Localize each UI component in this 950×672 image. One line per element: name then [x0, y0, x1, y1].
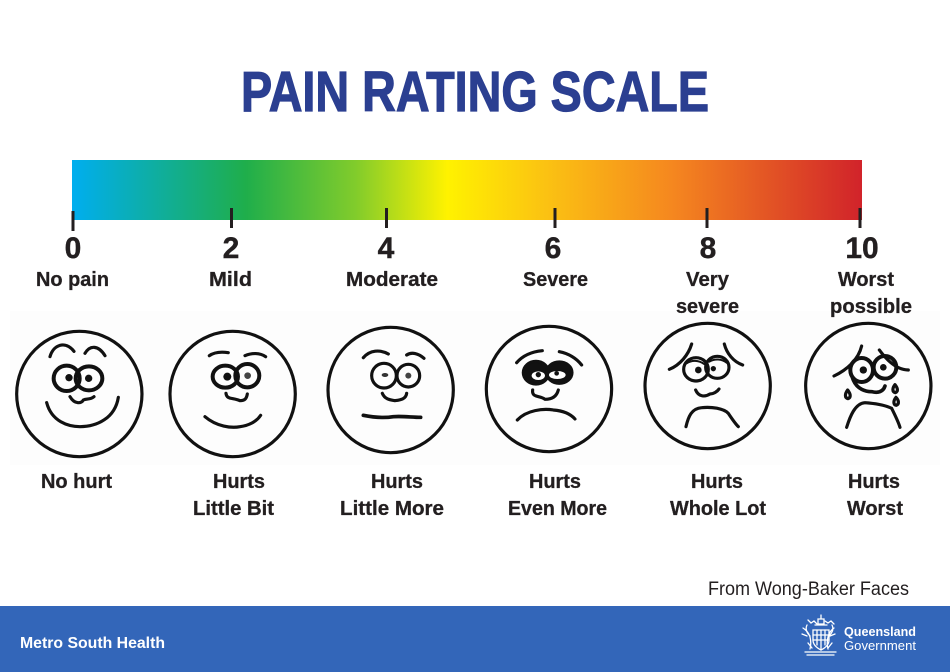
face descriptions: Hurts: [213, 471, 265, 493]
scale ticks: [72, 208, 862, 231]
face descriptions: Little Bit: [193, 498, 274, 520]
Queensland Government wordmark: Queensland: [844, 624, 916, 639]
pain severity labels: Very: [686, 269, 730, 291]
pain severity labels: No pain: [36, 269, 109, 291]
scale numbers: [65, 232, 879, 265]
pain severity labels: Worst: [838, 269, 894, 291]
pain severity labels: Severe: [523, 269, 588, 291]
footer band: [0, 606, 950, 672]
face descriptions: Hurts: [691, 471, 743, 493]
pain severity labels: possible: [830, 296, 912, 318]
scale numbers: 8: [700, 232, 716, 265]
face descriptions: Worst: [847, 498, 903, 520]
face descriptions: Hurts: [529, 471, 581, 493]
icon: Queensland coat of arms: [802, 615, 836, 655]
face descriptions: No hurt: [41, 471, 112, 493]
face descriptions: Hurts: [848, 471, 900, 493]
scale numbers: 6: [545, 232, 561, 265]
pain severity labels: Moderate: [346, 269, 438, 291]
face descriptions: Even More: [508, 498, 607, 520]
source credit: From Wong-Baker Faces: [708, 579, 909, 600]
Queensland Government wordmark: [844, 624, 916, 653]
pain severity labels: Mild: [209, 269, 252, 291]
scale numbers: 0: [65, 232, 81, 265]
scale numbers: 2: [223, 232, 239, 265]
face: hurts little more: [328, 327, 453, 453]
scale numbers: 4: [378, 232, 395, 265]
scale numbers: 10: [845, 232, 879, 265]
face: hurts even more: [486, 326, 612, 452]
footer organisation name: Metro South Health: [20, 635, 165, 652]
face descriptions: Hurts: [371, 471, 423, 493]
face: no hurt: [17, 331, 142, 457]
faces backdrop: [10, 311, 940, 465]
Queensland Government wordmark: Government: [844, 638, 916, 653]
pain gradient scale bar: [72, 160, 862, 220]
face: hurts whole lot: [645, 323, 770, 449]
pain severity labels: [36, 269, 912, 318]
face descriptions: Whole Lot: [670, 498, 766, 520]
face: hurts little bit: [170, 331, 295, 457]
face descriptions: Little More: [340, 498, 444, 520]
title: PAIN RATING SCALE: [241, 60, 709, 124]
pain severity labels: severe: [676, 296, 739, 318]
face descriptions: [41, 471, 903, 520]
face: hurts worst: [806, 323, 931, 449]
